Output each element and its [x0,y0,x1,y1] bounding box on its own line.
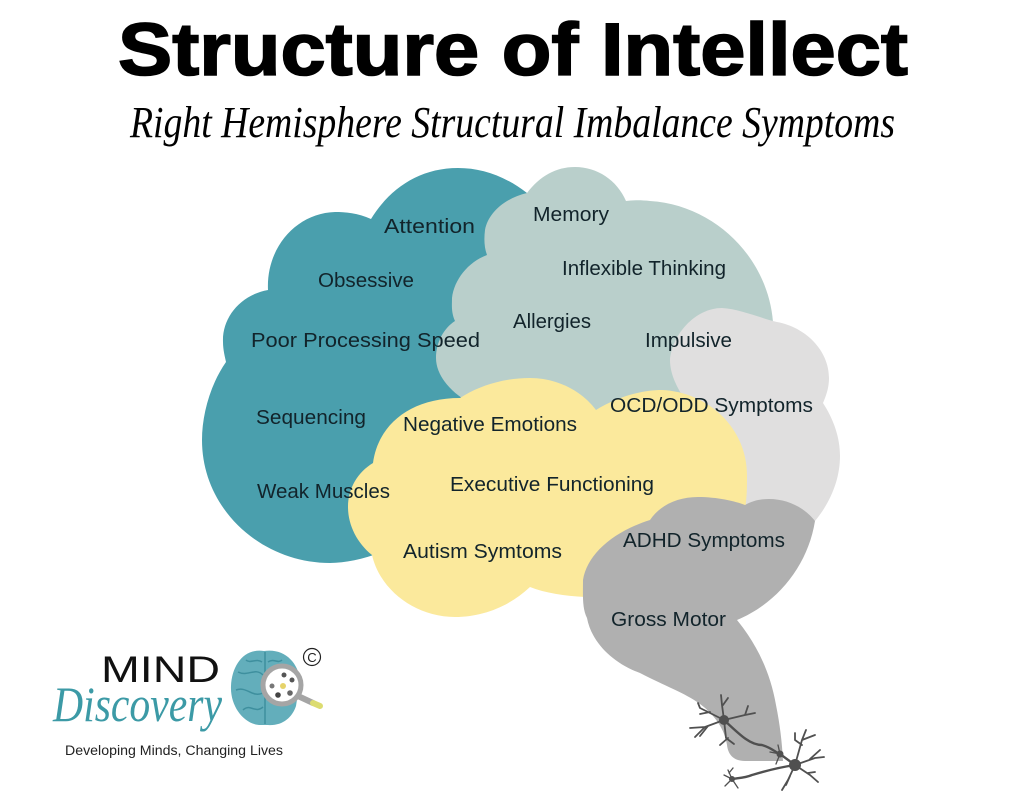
label: Attention: Attention [384,216,475,238]
brain diagram [202,167,840,790]
label: Autism Symtoms: Autism Symtoms [403,541,562,563]
label: Poor Processing Speed: Poor Processing Speed [251,330,480,352]
brain lobe: teal [202,168,540,563]
label: Impulsive: Impulsive [645,330,732,352]
logo wordmark: Discovery: Discovery [52,676,223,732]
brain lobe: light gray [670,308,840,540]
label: OCD/ODD Symptoms: OCD/ODD Symptoms [610,395,813,417]
label: Negative Emotions: Negative Emotions [403,414,577,436]
brain lobe: dark gray with stem [583,497,815,761]
label: Obsessive: Obsessive [318,270,414,292]
label: Sequencing: Sequencing [256,407,366,429]
icon: neurons [690,695,824,790]
label: Memory: Memory [533,204,609,226]
label: Executive Functioning: Executive Functioning [450,474,654,496]
subtitle: Right Hemisphere Structural Imbalance Symptoms [129,98,895,147]
logo copyright mark: C [307,650,317,665]
logo icon: brain with magnifier [231,651,320,725]
label: ADHD Symptoms: ADHD Symptoms [623,530,785,552]
logo tagline: Developing Minds, Changing Lives [65,743,283,758]
logo copyright mark [304,648,320,666]
brain lobe: pale green [436,167,800,440]
label: Allergies: Allergies [513,311,591,333]
brain lobe: yellow [348,378,747,617]
label: Gross Motor: Gross Motor [611,609,726,631]
logo wordmark: MIND: MIND [101,649,220,690]
title: Structure of Intellect [118,8,908,91]
logo [52,648,321,758]
label: Inflexible Thinking: Inflexible Thinking [562,258,726,280]
label: Weak Muscles: Weak Muscles [257,481,390,503]
